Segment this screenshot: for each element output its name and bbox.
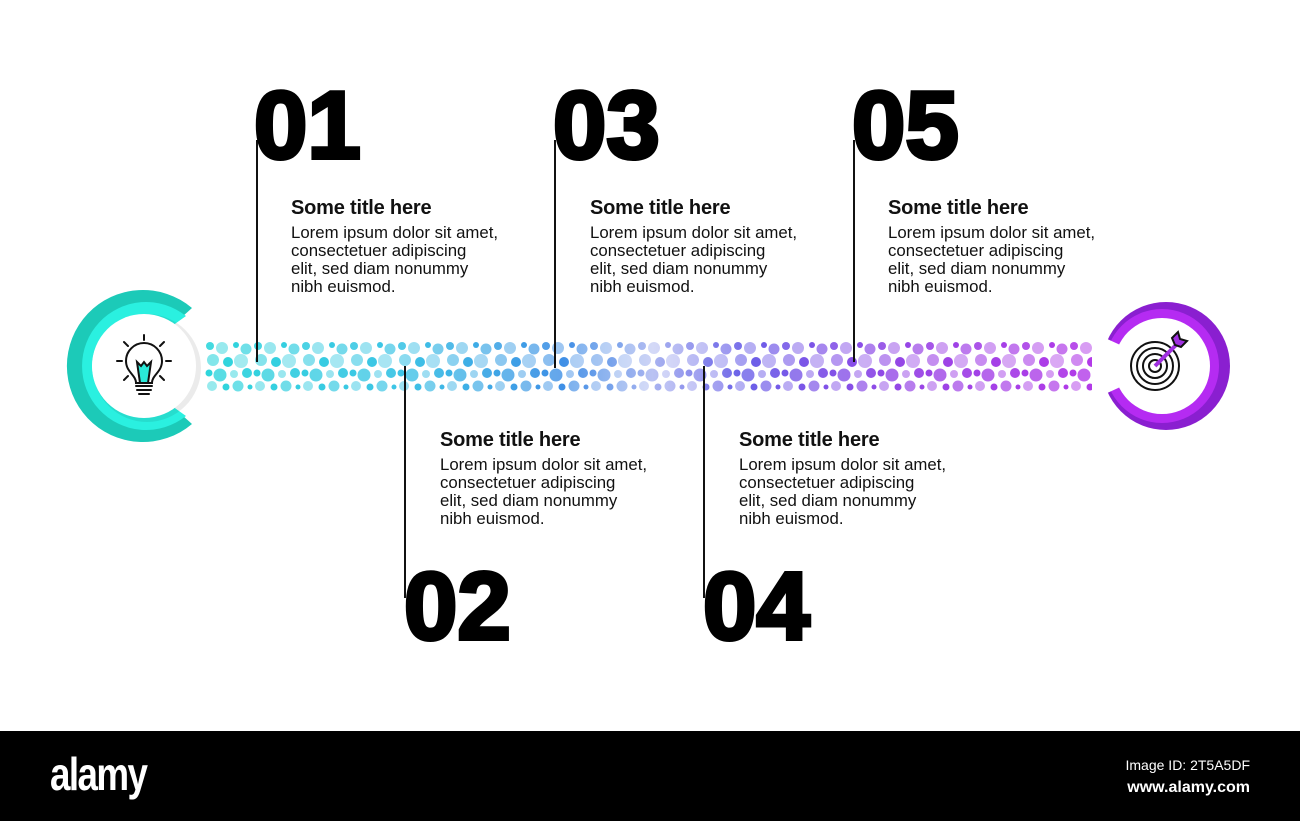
text block 5: Lorem ipsum dolor sit amet,: [888, 223, 1095, 242]
text block 3: elit, sed diam nonummy: [590, 259, 767, 278]
number 03: 03: [553, 72, 660, 179]
text block 3: [590, 197, 797, 296]
text block 1: Some title here: [291, 197, 431, 219]
icon: lightbulb: [117, 335, 171, 394]
text block 3: consectetuer adipiscing: [590, 241, 765, 260]
text block 4: nibh euismod.: [739, 509, 843, 528]
footer id: Image ID: 2T5A5DF: [1126, 757, 1250, 773]
text block 3: Some title here: [590, 197, 730, 219]
timeline graphic: [66, 290, 1230, 442]
text block 1: Lorem ipsum dolor sit amet,: [291, 223, 498, 242]
text block 2: elit, sed diam nonummy: [440, 491, 617, 510]
text block 5: nibh euismod.: [888, 277, 992, 296]
text block 4: consectetuer adipiscing: [739, 473, 914, 492]
text block 1: nibh euismod.: [291, 277, 395, 296]
end circle: target: [1092, 302, 1230, 430]
text block 5: Some title here: [888, 197, 1028, 219]
start circle: lightbulb: [67, 290, 201, 442]
text block 2: nibh euismod.: [440, 509, 544, 528]
text block 4: Lorem ipsum dolor sit amet,: [739, 455, 946, 474]
text block 3: Lorem ipsum dolor sit amet,: [590, 223, 797, 242]
text block 4: Some title here: [739, 429, 879, 451]
text block 2: Some title here: [440, 429, 580, 451]
text block 3: nibh euismod.: [590, 277, 694, 296]
number 05: 05: [852, 72, 959, 179]
text block 5: [888, 197, 1095, 296]
connector lines: [256, 140, 258, 362]
text block 5: elit, sed diam nonummy: [888, 259, 1065, 278]
footer logo: alamy: [50, 748, 146, 800]
text block 2: consectetuer adipiscing: [440, 473, 615, 492]
dotted band: [205, 340, 1100, 392]
number 01: 01: [254, 72, 361, 179]
text block 2: [440, 429, 647, 528]
text block 4: elit, sed diam nonummy: [739, 491, 916, 510]
text block 1: consectetuer adipiscing: [291, 241, 466, 260]
text block 1: [291, 197, 498, 296]
footer bar: [0, 731, 1300, 821]
number 02: 02: [404, 553, 511, 660]
text block 1: elit, sed diam nonummy: [291, 259, 468, 278]
text block 2: Lorem ipsum dolor sit amet,: [440, 455, 647, 474]
text block 4: [739, 429, 946, 528]
text block 5: consectetuer adipiscing: [888, 241, 1063, 260]
number 04: 04: [703, 553, 810, 660]
icon: target with arrow: [1131, 332, 1187, 390]
footer url: www.alamy.com: [1127, 779, 1250, 796]
